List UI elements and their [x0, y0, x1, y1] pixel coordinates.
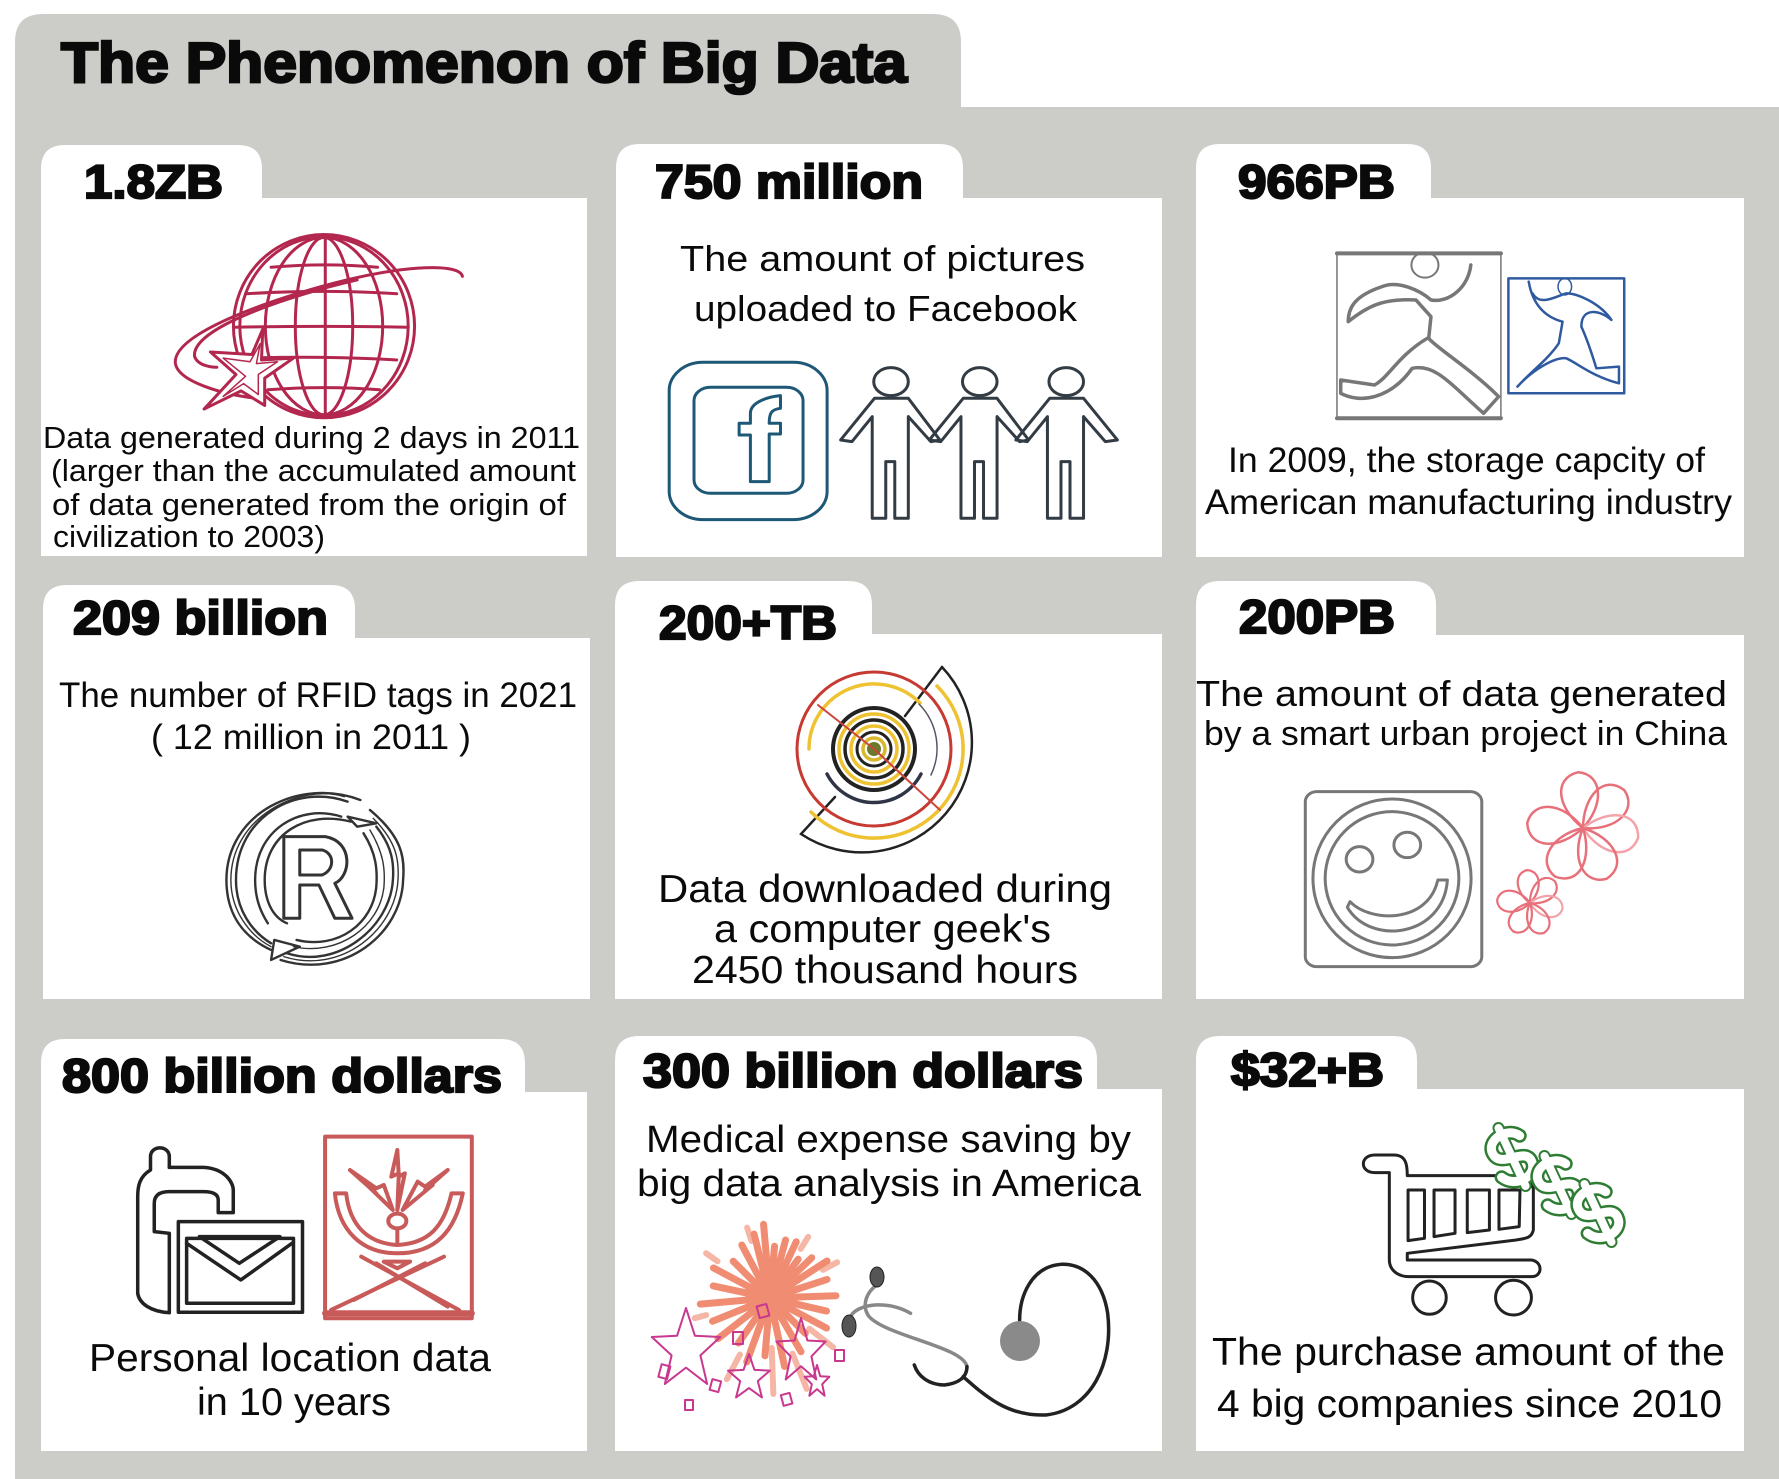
panel: 200PB — [1196, 581, 1744, 999]
heading: 1.8ZB: 1.8ZB — [84, 155, 223, 208]
icon: registered mark with arrows — [226, 793, 404, 965]
panel: 800 billion dollars — [41, 1039, 587, 1451]
description: of data generated from the origin of — [52, 487, 566, 522]
icon: shopping cart — [1363, 1155, 1540, 1315]
icon: grey runner — [1337, 252, 1501, 418]
description: Data downloaded during — [658, 868, 1112, 911]
description: in 10 years — [197, 1381, 391, 1424]
panel: 750 million — [616, 144, 1162, 557]
description: ( 12 million in 2011 ) — [151, 718, 471, 757]
heading: 200PB: 200PB — [1239, 590, 1395, 643]
panel: 200+TB — [615, 581, 1162, 999]
icon: facebook logo — [669, 362, 827, 520]
panel: 209 billion — [43, 585, 590, 999]
description — [658, 868, 1112, 992]
description — [1205, 441, 1733, 522]
heading: 966PB: 966PB — [1238, 155, 1395, 208]
description — [1196, 673, 1727, 753]
icon: green dollar signs — [1482, 1121, 1626, 1250]
icon: concentric target rings — [797, 667, 972, 852]
icon: three people holding hands — [841, 368, 1117, 518]
description: civilization to 2003) — [53, 519, 325, 554]
description: 4 big companies since 2010 — [1217, 1383, 1722, 1426]
icon: smiley face — [1305, 792, 1482, 967]
icon: stethoscope — [842, 1264, 1109, 1415]
description — [89, 1337, 491, 1424]
panel: 300 billion dollars — [615, 1036, 1162, 1451]
panel: 966PB — [1196, 144, 1744, 557]
description: The amount of pictures — [680, 238, 1085, 279]
description: The purchase amount of the — [1212, 1331, 1725, 1374]
description: uploaded to Facebook — [694, 288, 1078, 329]
panel: 1.8ZB — [41, 145, 587, 556]
description: big data analysis in America — [637, 1163, 1142, 1205]
icon: globe with star — [175, 235, 462, 418]
description: The amount of data generated — [1196, 673, 1727, 714]
description — [59, 676, 577, 757]
icon: red framed envelope with antenna — [325, 1137, 472, 1318]
icon: magenta stars — [652, 1304, 844, 1410]
description: In 2009, the storage capcity of — [1228, 441, 1705, 480]
heading: 750 million: 750 million — [655, 155, 923, 208]
description — [1212, 1331, 1725, 1426]
icon: blue runner — [1508, 278, 1624, 393]
description: Data generated during 2 days in 2011 — [43, 420, 580, 455]
description: a computer geek's — [714, 908, 1051, 951]
heading: 300 billion dollars: 300 billion dollars — [643, 1044, 1083, 1097]
icon: large flower — [1526, 771, 1641, 886]
description: American manufacturing industry — [1205, 483, 1733, 522]
description — [637, 1119, 1142, 1205]
description: 2450 thousand hours — [692, 949, 1078, 992]
heading: 800 billion dollars: 800 billion dollars — [62, 1049, 502, 1102]
description: by a smart urban project in China — [1204, 715, 1727, 753]
heading: 209 billion: 209 billion — [73, 591, 328, 644]
description: Medical expense saving by — [646, 1119, 1131, 1161]
icon: small flower — [1496, 869, 1564, 937]
heading: $32+B: $32+B — [1231, 1043, 1384, 1096]
icon: fireworks burst — [695, 1224, 837, 1394]
description: (larger than the accumulated amount — [51, 453, 576, 488]
panel: $32+B — [1196, 1036, 1744, 1451]
description — [680, 238, 1085, 329]
description: Personal location data — [89, 1337, 491, 1380]
description: The number of RFID tags in 2021 — [59, 676, 577, 715]
icon: mobile phone and envelope — [138, 1148, 303, 1313]
heading: 200+TB: 200+TB — [659, 596, 837, 649]
title: The Phenomenon of Big Data — [61, 31, 908, 95]
description — [43, 420, 580, 554]
